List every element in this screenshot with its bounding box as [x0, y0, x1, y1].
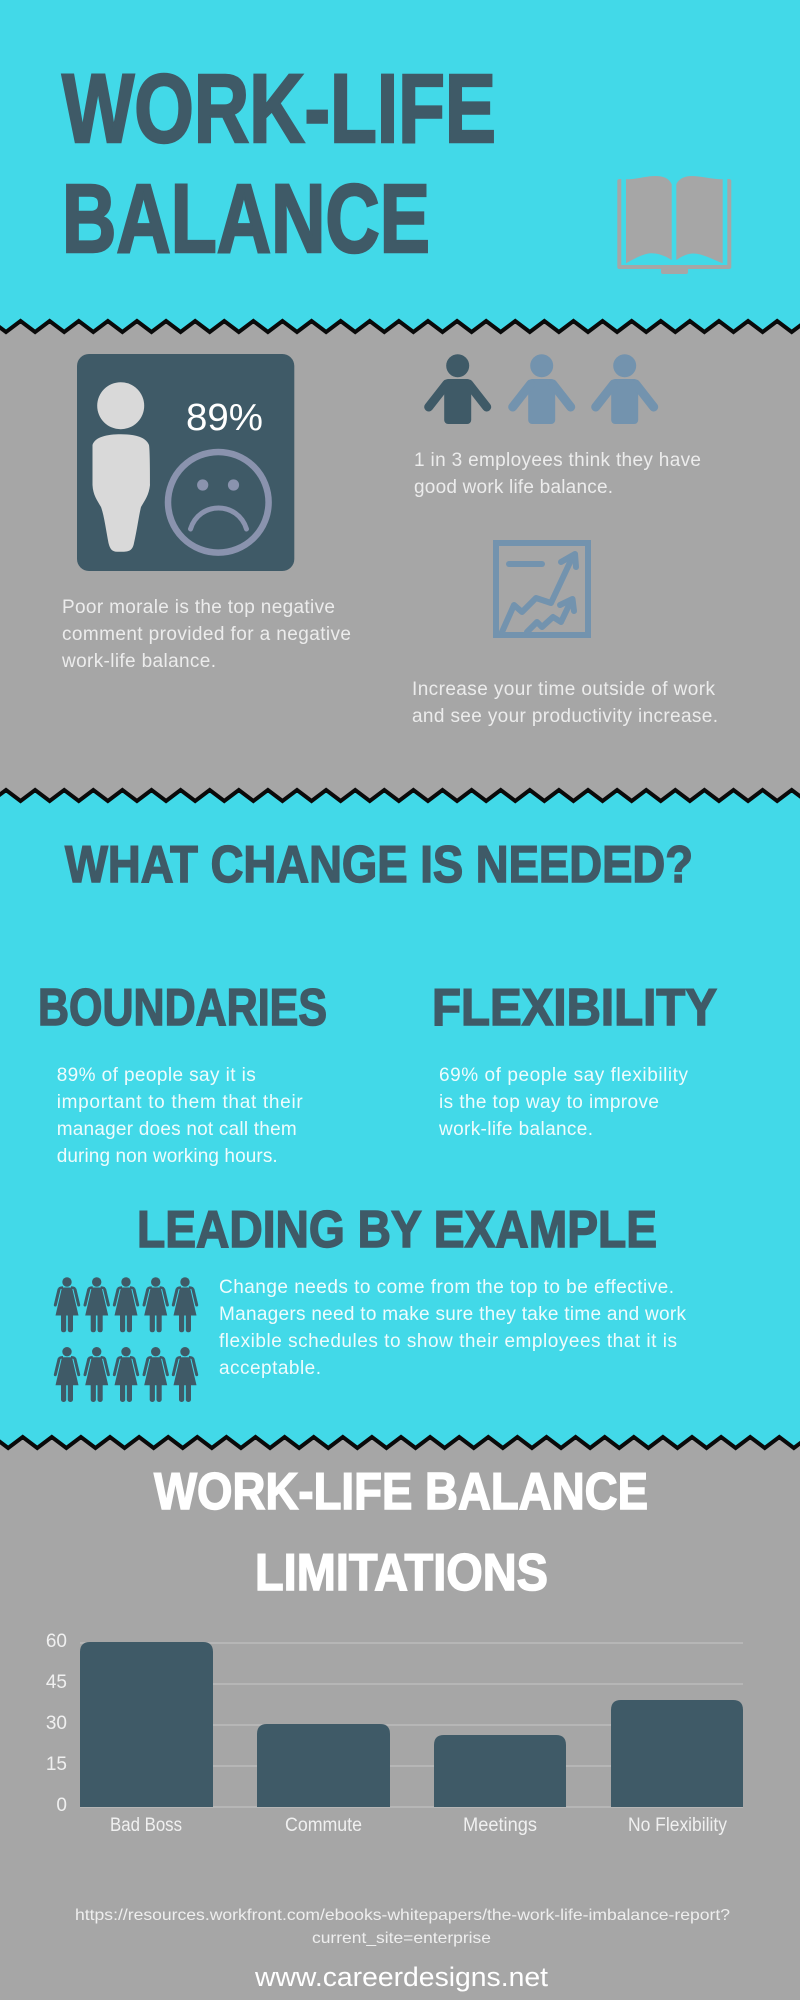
text: poor morale: work-life balance. [61, 651, 216, 672]
zigzag border 1 [0, 321, 800, 332]
heading: leading by example: LEADING BY EXAMPLE [137, 1201, 657, 1259]
icon: open book [617, 176, 731, 274]
bar chart: limitations [46, 1631, 743, 1836]
text: boundaries: manager does not call them [57, 1119, 297, 1140]
panel: what change is needed background [0, 790, 800, 1437]
text: increase time [412, 679, 718, 727]
text: flexibility: is the top way to improve [439, 1092, 659, 1113]
text: leading by example: acceptable. [219, 1358, 321, 1379]
bar: Bad Boss [80, 1642, 213, 1807]
y axis labels: 0 [56, 1795, 67, 1816]
heading: boundaries: BOUNDARIES [38, 979, 327, 1037]
y axis labels: 30 [46, 1713, 67, 1734]
text: source url: current_site=enterprise [312, 1930, 491, 1947]
panel: statistics background [0, 321, 800, 790]
text: 1 in 3 employees [414, 450, 701, 498]
bar: Commute [257, 1724, 390, 1807]
text: poor morale: comment provided for a negative [62, 624, 351, 645]
text: leading by example: Managers need to make sure they take time and work [219, 1304, 686, 1325]
text: leading by example [219, 1277, 686, 1379]
text: flexibility: 69% of people say flexibility [439, 1065, 688, 1086]
panel: limitations background [0, 1437, 800, 2000]
text: source url: https://resources.workfront.com/ebooks-whitepapers/the-work-life-imbalance-report? [75, 1907, 730, 1924]
x axis labels: Bad Boss [110, 1815, 182, 1836]
x axis labels: Meetings [463, 1815, 537, 1836]
text: increase time: Increase your time outside of work [412, 679, 716, 700]
text: boundaries: 89% of people say it is [57, 1065, 256, 1086]
text: boundaries: during non working hours. [57, 1146, 278, 1167]
y axis labels [46, 1631, 67, 1816]
x axis labels: Commute [285, 1815, 362, 1836]
y axis labels: 15 [46, 1754, 67, 1775]
heading: what change is needed: WHAT CHANGE IS NEEDED? [65, 836, 693, 894]
icon: sad face [168, 452, 269, 553]
text: leading by example: flexible schedules to show their employees that it is [219, 1331, 677, 1352]
x axis labels: No Flexibility [628, 1815, 727, 1836]
panel: header background [0, 0, 800, 321]
heading: work-life balance limitations: LIMITATIONS [255, 1544, 548, 1602]
bar: No Flexibility [611, 1700, 743, 1807]
zigzag border 2 [0, 790, 800, 801]
text: poor morale: Poor morale is the top negative [62, 597, 335, 618]
text: 1 in 3 employees: 1 in 3 employees think they have [414, 450, 701, 471]
heading: work-life balance limitations: WORK-LIFE BALANCE [154, 1463, 648, 1521]
icon: rows of women [55, 1277, 197, 1402]
stat: 89%: 89% [186, 397, 263, 439]
heading: flexibility: FLEXIBILITY [432, 979, 717, 1037]
icon: productivity chart [496, 543, 588, 635]
title: WORK-LIFE [62, 54, 496, 163]
text: flexibility: work-life balance. [438, 1119, 593, 1140]
text: leading by example: Change needs to come from the top to be effective. [219, 1277, 674, 1298]
text: poor morale [61, 597, 351, 672]
text: 1 in 3 employees: good work life balance. [414, 477, 613, 498]
title: BALANCE [62, 164, 430, 273]
x axis labels [110, 1815, 727, 1836]
y axis labels: 60 [46, 1631, 67, 1652]
bar: Meetings [434, 1735, 566, 1807]
icon: person silhouette [92, 382, 150, 552]
y axis labels: 45 [46, 1672, 67, 1693]
icon: three people [429, 354, 654, 424]
heading: work-life balance limitations [154, 1463, 648, 1602]
text: website: www.careerdesigns.net [254, 1962, 549, 1992]
text: source url [75, 1907, 730, 1947]
panel: 89% morale card [77, 354, 294, 571]
text: increase time: and see your productivity increase. [412, 706, 718, 727]
title [62, 54, 496, 273]
zigzag border 3 [0, 1437, 800, 1448]
text: flexibility [438, 1065, 688, 1140]
text: boundaries: important to them that their [57, 1092, 303, 1113]
text: boundaries [57, 1065, 303, 1167]
